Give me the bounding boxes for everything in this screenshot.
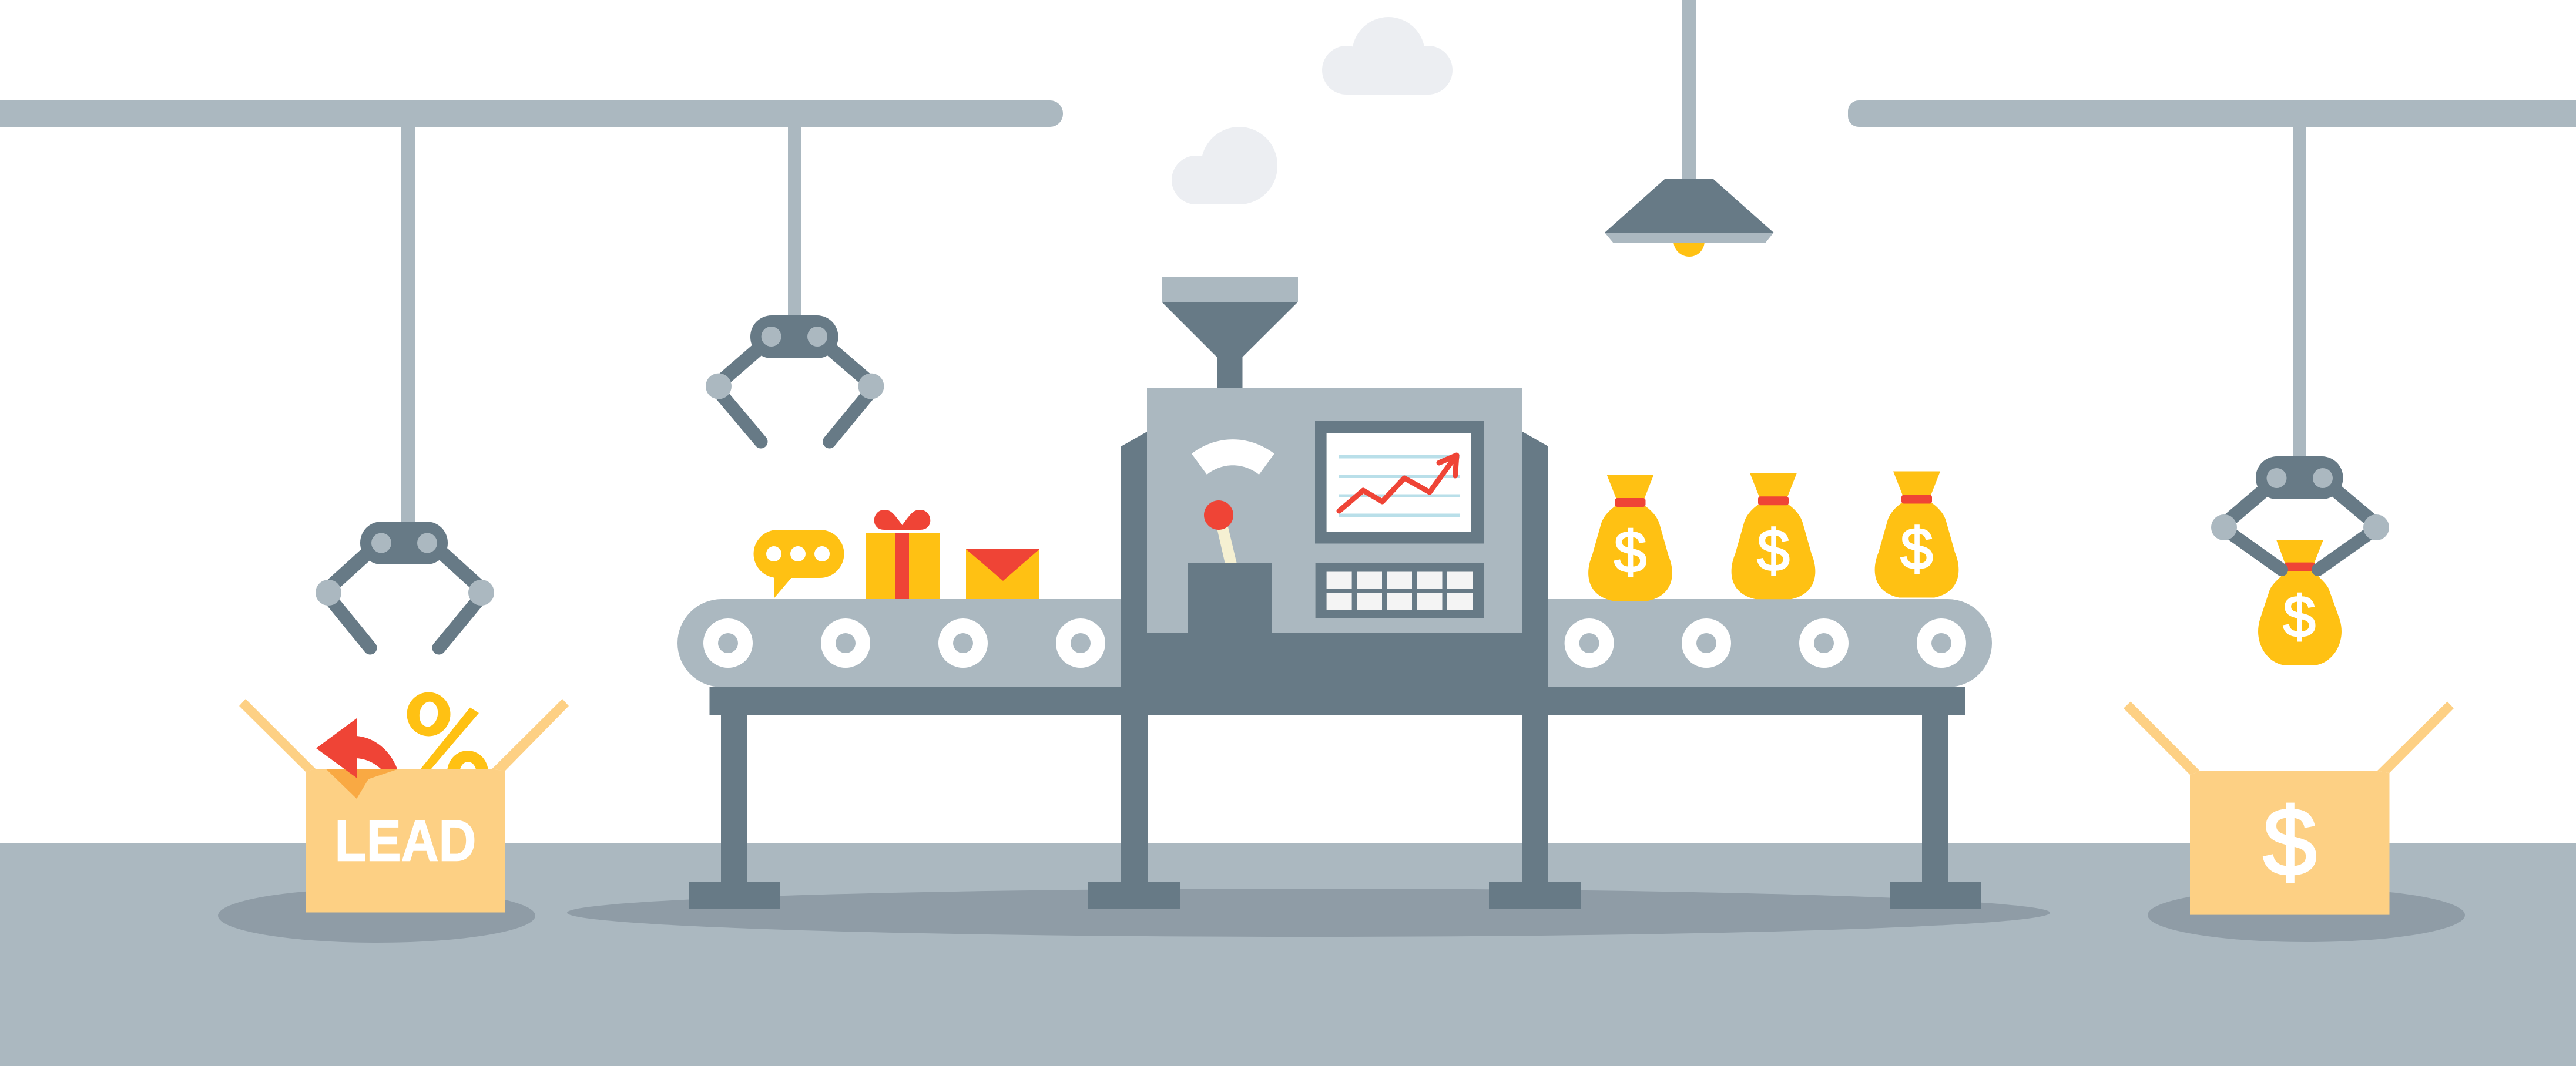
middle robotic claw xyxy=(706,126,884,442)
left robotic claw xyxy=(316,126,494,648)
lead box contents behind box: percent sign xyxy=(407,692,488,794)
floor shadow: conveyor xyxy=(567,889,2050,937)
held money bag: $ xyxy=(2283,584,2316,650)
machine hopper xyxy=(1162,277,1298,389)
lead box flap fold xyxy=(326,769,397,799)
lead box arrow tail xyxy=(357,736,397,769)
left conveyor belt xyxy=(677,599,1128,687)
lead box: flaps and front xyxy=(239,699,569,913)
revenue box xyxy=(2124,701,2454,915)
left ceiling rail xyxy=(0,100,1063,127)
right ceiling rail xyxy=(1848,100,2576,127)
cloud: upper xyxy=(1322,17,1453,95)
lead box label: LEAD xyxy=(335,808,476,873)
floor xyxy=(0,843,2576,1066)
lever box xyxy=(1188,563,1272,633)
right robotic claw holding money bag xyxy=(2211,126,2389,665)
keypad xyxy=(1316,563,1484,618)
money bag 2: $ xyxy=(1757,517,1790,583)
monitor with rising chart xyxy=(1315,421,1484,544)
money bag 1: $ xyxy=(1614,519,1646,585)
money bag 3 xyxy=(1875,471,1958,598)
machine front panel xyxy=(1147,388,1522,633)
cloud: lower xyxy=(1172,127,1277,204)
held money bag xyxy=(2258,540,2342,665)
floor shadow: right box xyxy=(2148,888,2465,942)
revenue box: $ xyxy=(2263,788,2317,896)
conveyor table top xyxy=(710,687,1965,715)
icon: envelope xyxy=(966,549,1039,599)
money bag 3: $ xyxy=(1900,516,1933,581)
machine xyxy=(1121,277,1548,687)
money bag 1 xyxy=(1588,475,1672,601)
icon: chat bubble xyxy=(753,530,844,598)
gauge xyxy=(1192,439,1274,475)
hanging lamp xyxy=(1605,0,1773,257)
floor shadow: left box xyxy=(218,889,535,943)
lever xyxy=(1204,500,1237,564)
money bag 2 xyxy=(1732,473,1815,599)
conveyor table legs xyxy=(689,705,1981,909)
machine base xyxy=(1121,432,1548,687)
icon: red arrow head xyxy=(316,718,357,778)
right conveyor belt xyxy=(1539,599,1992,687)
icon: gift xyxy=(866,510,940,599)
